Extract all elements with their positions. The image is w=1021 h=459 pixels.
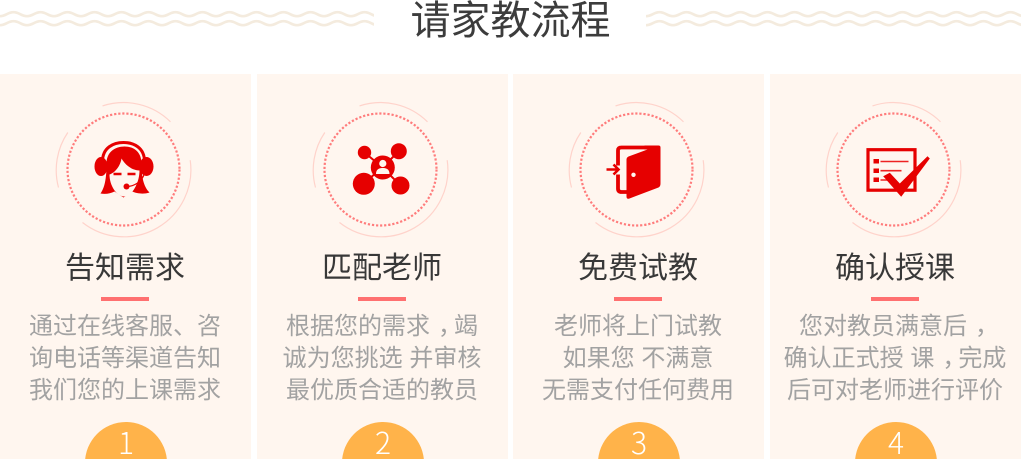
decorative wave right [646, 11, 1021, 26]
description: 如果您 不满意 [563, 345, 713, 372]
divider bar [358, 297, 406, 301]
description: 确认正式授 课 ，完成 [784, 345, 1006, 372]
description [29, 313, 221, 404]
description: 老师将上门试教 [554, 313, 722, 340]
description: 无需支付任何费用 [542, 377, 734, 404]
panel: step 3 免费试教 [513, 74, 764, 459]
panel: step 2 匹配老师 [257, 74, 508, 459]
icon: checklist with tick [826, 102, 962, 238]
description: 根据您的需求 ，竭 [286, 313, 478, 340]
decorative wave left [0, 11, 374, 26]
icon: open door with arrow [568, 102, 704, 238]
divider bar [614, 297, 662, 301]
description: 您对教员满意后 ， [799, 313, 999, 340]
number badge [342, 422, 424, 459]
heading: 告知需求 [65, 252, 185, 285]
divider bar [101, 297, 149, 301]
description: 通过在线客服、咨 [29, 313, 221, 340]
heading: 确认授课 [835, 252, 955, 285]
title: 请家教流程 [410, 0, 610, 43]
divider bar [871, 297, 919, 301]
number badge [85, 422, 167, 459]
description [283, 313, 481, 404]
number badge [855, 422, 937, 459]
heading: 免费试教 [578, 252, 698, 285]
description [542, 313, 734, 404]
icon: network of people [312, 102, 448, 238]
description: 询电话等渠道告知 [29, 345, 221, 372]
heading: 匹配老师 [322, 252, 442, 285]
description: 后可对老师进行评价 [787, 377, 1003, 404]
number badge [598, 422, 680, 459]
icon: customer service agent [56, 102, 192, 238]
panel: step 1 告知需求 [0, 74, 251, 459]
description: 我们您的上课需求 [29, 377, 221, 404]
panel: step 4 确认授课 [770, 74, 1021, 459]
description: 最优质合适的教员 [286, 377, 478, 404]
description: 诚为您挑选 并审核 [283, 345, 481, 372]
description [784, 313, 1006, 404]
